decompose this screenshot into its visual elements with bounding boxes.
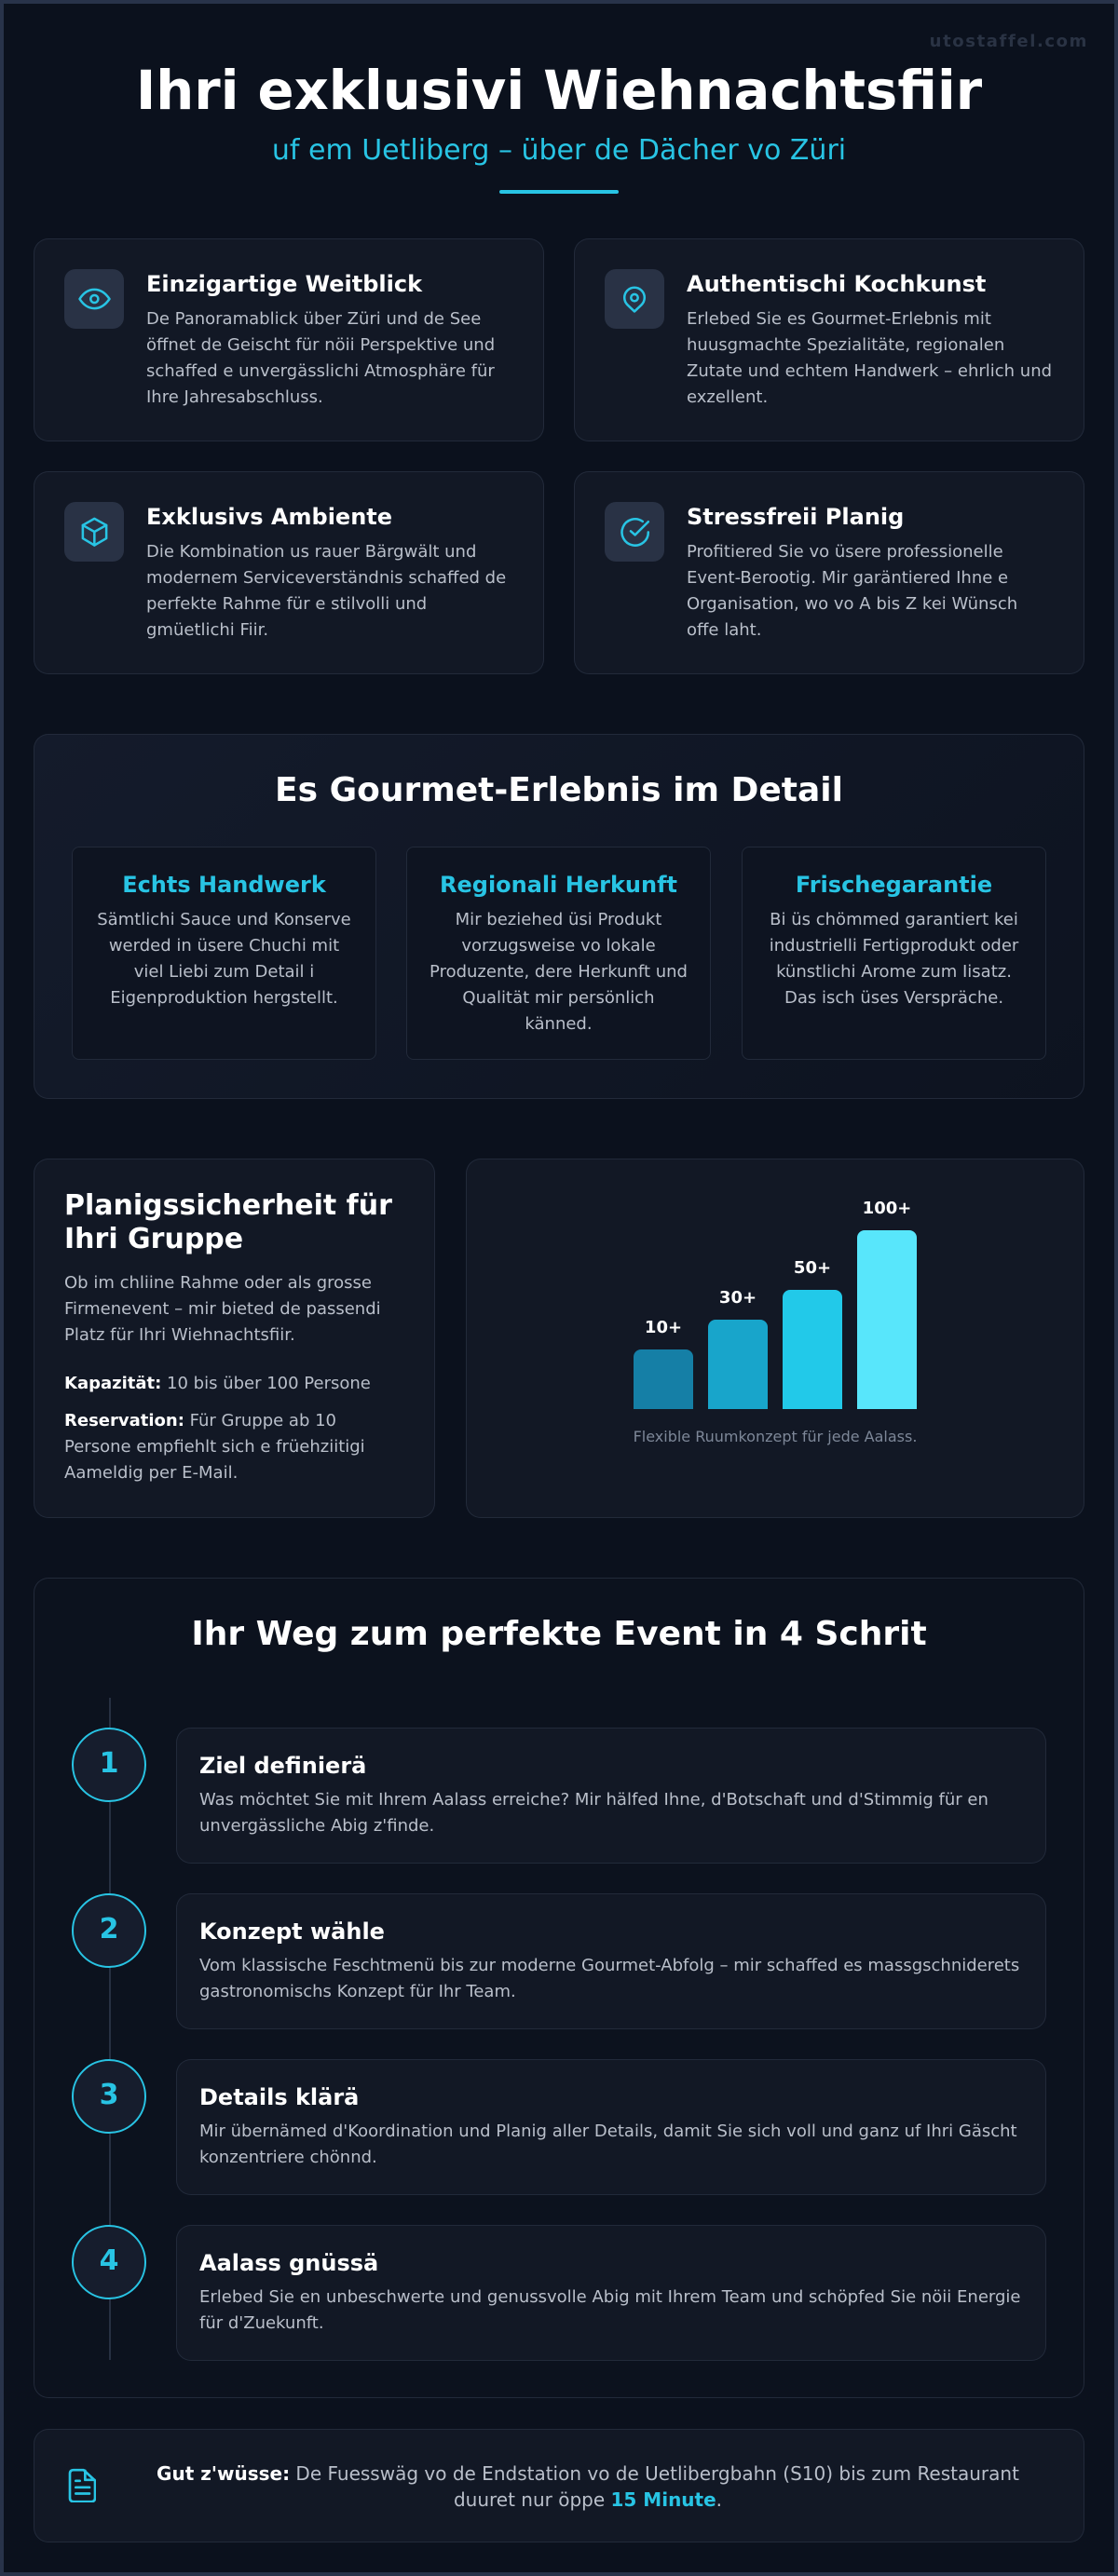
title underline <box>499 190 619 194</box>
intro text: Platz für Ihri Wiehnachtsfiir. <box>64 1325 295 1345</box>
label 30+: 30+ <box>719 1288 757 1308</box>
text: perfekte Rahme für e stilvolli und <box>146 594 427 614</box>
label 100+: 100+ <box>863 1199 911 1218</box>
bar 50+ <box>783 1290 842 1409</box>
timeline line <box>109 1698 111 2360</box>
reservation: Persone empfiehlt sich e früehziitigi <box>64 1437 365 1457</box>
card text: Bi üs chömmed garantiert kei <box>770 910 1018 929</box>
step 2 number: 2 <box>100 1913 118 1946</box>
bar 30+ <box>708 1320 768 1409</box>
step text <box>199 2122 1017 2167</box>
card text: vorzugsweise vo lokale <box>461 936 656 956</box>
card text: Qualität mir persönlich <box>462 988 655 1008</box>
panel: Stressfreii Planig <box>574 471 1084 674</box>
step 4 card <box>176 2225 1046 2361</box>
text: huusgmachte Spezialitäte, regionalen <box>687 335 1004 355</box>
text: Die Kombination us rauer Bärgwält und <box>146 542 476 562</box>
card text <box>770 910 1019 1008</box>
card text: Das isch üses Verspräche. <box>784 988 1003 1008</box>
intro text <box>64 1273 381 1345</box>
step 2 card <box>176 1893 1046 2029</box>
step 1 number <box>72 1728 146 1802</box>
subtitle: uf em Uetliberg – über de Dächer vo Züri <box>272 134 846 167</box>
reservation: Reservation: Für Gruppe ab 10 <box>64 1411 336 1430</box>
text <box>687 309 1052 407</box>
card text: industrielli Fertigprodukt oder <box>770 936 1018 956</box>
card text: Eigenproduktion hergstellt. <box>110 988 338 1008</box>
reservation: Aameldig per E-Mail. <box>64 1463 238 1483</box>
step text: Was möchtet Sie mit Ihrem Aalass erreiche? Mir hälfed Ihne, d'Botschaft und d'Stimmig für en <box>199 1790 988 1810</box>
bar 100+ <box>857 1230 917 1409</box>
step title: Ziel definierä <box>199 1753 366 1779</box>
icon: check circle <box>605 502 664 562</box>
panel: Authentischi Kochkunst <box>574 238 1084 441</box>
heading: Ihri Gruppe <box>64 1223 243 1255</box>
step text: konzentriere chönnd. <box>199 2148 377 2167</box>
text: gmüetlichi Fiir. <box>146 620 268 640</box>
heading: Stressfreii Planig <box>687 504 904 530</box>
panel: Planigssicherheit <box>34 1159 435 1518</box>
intro text: Firmenevent – mir bieted de passendi <box>64 1299 381 1319</box>
text: Organisation, wo vo A bis Z kei Wünsch <box>687 594 1017 614</box>
card: Frischegarantie <box>742 847 1046 1060</box>
step 4 number <box>72 2225 146 2299</box>
card text: känned. <box>525 1014 593 1034</box>
card heading: Regionali Herkunft <box>440 872 677 898</box>
card heading: Echts Handwerk <box>122 872 326 898</box>
card text: Mir beziehed üsi Produkt <box>456 910 661 929</box>
panel: callout <box>34 2429 1084 2542</box>
step title: Details klärä <box>199 2084 359 2110</box>
text: modernem Serviceverständnis schaffed de <box>146 568 506 588</box>
panel: bar chart <box>466 1159 1084 1518</box>
reservation <box>64 1411 365 1483</box>
heading: Es Gourmet-Erlebnis im Detail <box>275 771 843 809</box>
text: Profitiered Sie vo üsere professionelle <box>687 542 1003 562</box>
intro text: Ob im chliine Rahme oder als grosse <box>64 1273 372 1293</box>
callout text: duuret nur öppe 15 Minute. <box>454 2488 722 2511</box>
text: öffnet de Geischt für nöii Perspektive und <box>146 335 495 355</box>
heading: Ihr Weg zum perfekte Event in 4 Schrit <box>191 1615 927 1653</box>
step 4 number: 4 <box>100 2244 118 2277</box>
card text: viel Liebi zum Detail i <box>134 962 314 982</box>
step text: Mir übernämed d'Koordination und Planig aller Details, damit Sie sich voll und ganz uf Ihri Gäscht <box>199 2122 1017 2141</box>
step 3 number: 3 <box>100 2079 118 2111</box>
step text: Erlebed Sie en unbeschwerte und genussvolle Abig mit Ihrem Team und schöpfed Sie nöii Energie <box>199 2287 1020 2307</box>
label 50+: 50+ <box>794 1258 831 1278</box>
watermark: utostaffel.com <box>930 32 1088 51</box>
card text <box>429 910 688 1034</box>
heading <box>64 1189 392 1255</box>
step text <box>199 1956 1019 2001</box>
step text <box>199 2287 1020 2333</box>
icon: eye <box>64 269 124 329</box>
step 3 card <box>176 2059 1046 2195</box>
step title: Aalass gnüssä <box>199 2250 378 2276</box>
step text: unvergässliche Abig z'finde. <box>199 1816 434 1836</box>
text: De Panoramablick über Züri und de See <box>146 309 481 329</box>
step title: Konzept wähle <box>199 1918 385 1945</box>
card: Echts Handwerk <box>72 847 376 1060</box>
text: schaffed e unvergässlichi Atmosphäre für <box>146 361 495 381</box>
step text: für d'Zuekunft. <box>199 2313 324 2333</box>
capacity: Kapazität: 10 bis über 100 Persone <box>64 1374 371 1393</box>
card text: künstlichi Arome zum Iisatz. <box>776 962 1012 982</box>
heading: Planigssicherheit für <box>64 1189 392 1222</box>
callout text: Gut z'wüsse: De Fuesswäg vo de Endstation vo de Uetlibergbahn (S10) bis zum Restaurant <box>157 2462 1019 2485</box>
text <box>146 542 506 640</box>
title: Ihri exklusivi Wiehnachtsfiir <box>136 60 982 122</box>
step 1 card <box>176 1728 1046 1864</box>
step 1 number: 1 <box>100 1747 118 1780</box>
panel: Exklusivs Ambiente <box>34 471 544 674</box>
caption: Flexible Ruumkonzept für jede Aalass. <box>634 1428 917 1445</box>
panel: 4 steps <box>34 1578 1084 2398</box>
icon: document <box>69 2468 96 2502</box>
step 2 number <box>72 1893 146 1968</box>
callout text <box>157 2462 1019 2511</box>
card heading: Frischegarantie <box>796 872 992 898</box>
step text: Vom klassische Feschtmenü bis zur moderne Gourmet-Abfolg – mir schaffed es massgschniderets <box>199 1956 1019 1975</box>
card text <box>97 910 351 1008</box>
heading: Authentischi Kochkunst <box>687 271 986 297</box>
bar 10+ <box>634 1349 693 1409</box>
panel: Einzigartige Weitblick <box>34 238 544 441</box>
panel: Gourmet-Erlebnis <box>34 734 1084 1099</box>
text <box>687 542 1017 640</box>
icon: cube <box>64 502 124 562</box>
text: Event-Berootig. Mir garäntiered Ihne e <box>687 568 1008 588</box>
text: exzellent. <box>687 387 768 407</box>
step 3 number <box>72 2059 146 2134</box>
card text: werded in üsere Chuchi mit <box>109 936 339 956</box>
card: Regionali Herkunft <box>406 847 711 1060</box>
heading: Einzigartige Weitblick <box>146 271 422 297</box>
step text <box>199 1790 988 1836</box>
text: Erlebed Sie es Gourmet-Erlebnis mit <box>687 309 991 329</box>
heading: Exklusivs Ambiente <box>146 504 392 530</box>
card text: Sämtlichi Sauce und Konserve <box>97 910 351 929</box>
text <box>146 309 495 407</box>
label 10+: 10+ <box>645 1318 682 1337</box>
card text: Produzente, dere Herkunft und <box>429 962 688 982</box>
text: offe laht. <box>687 620 761 640</box>
step text: gastronomischs Konzept für Ihr Team. <box>199 1982 516 2001</box>
icon: map pin <box>605 269 664 329</box>
text: Zutate und echtem Handwerk – ehrlich und <box>687 361 1052 381</box>
text: Ihre Jahresabschluss. <box>146 387 323 407</box>
